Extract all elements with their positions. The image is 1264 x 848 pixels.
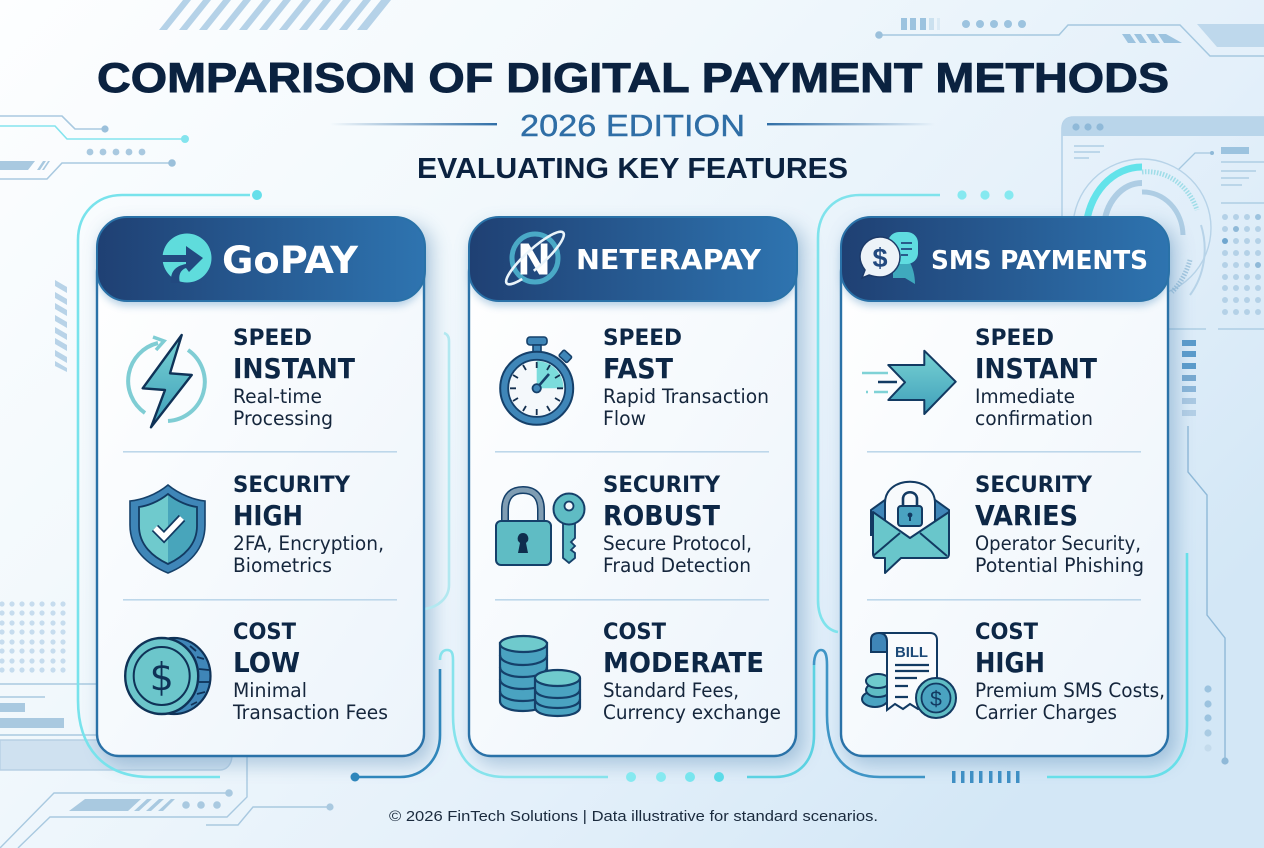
speed text: Real-time [233,385,322,408]
security text: HIGH [233,499,303,532]
header shadow [470,226,796,306]
cost text: Currency exchange [603,701,781,724]
card body [841,250,1168,756]
connector lines around cards [78,190,1187,783]
decoration: top hatch stripes [159,0,391,30]
decoration: dashboard window with gauge [1062,117,1264,329]
speed text: FAST [603,352,673,385]
speed text: Processing [233,407,333,430]
security text: 2FA, Encryption, [233,532,384,555]
panel: sms payments [841,217,1169,756]
decoration: lower left panels and circuit [0,684,334,848]
cost text: MODERATE [603,646,764,679]
cost text: HIGH [975,646,1045,679]
cost text [603,620,781,724]
row: security [871,473,1144,577]
header shadow [842,226,1168,306]
cost text: Standard Fees, [603,679,739,702]
security text: Secure Protocol, [603,532,752,555]
header bar [469,217,797,301]
security text: Potential Phishing [975,554,1144,577]
security text [975,473,1144,577]
icon: stopwatch [500,337,573,425]
row: cost [862,620,1165,724]
speed text: Rapid Transaction [603,385,769,408]
icon: coin [125,638,210,714]
footer note: © 2026 FinTech Solutions | Data illustrative for standard scenarios. [389,808,878,825]
row: speed [128,326,355,430]
speed text: SPEED [603,326,682,351]
cost text: COST [233,620,296,645]
decoration: right side bars, line and dots [1182,340,1229,765]
icon: lightning bolt [128,335,205,427]
cost text: COST [603,620,666,645]
row: security [496,473,752,577]
icon: padlock and key [496,490,584,565]
decoration: left hatch [55,280,67,372]
speed text: Immediate [975,385,1075,408]
security text: SECURITY [975,473,1093,498]
row: security [130,473,384,577]
panel: gopay [97,217,425,756]
header bar [97,217,425,301]
security text: Fraud Detection [603,554,751,577]
panel: neterapay [469,217,797,756]
speed text: confirmation [975,407,1093,430]
speed text: Flow [603,407,646,430]
speed text: SPEED [975,326,1054,351]
decoration: lower left dot grid [0,601,66,673]
icon: bill with coins: BILL [895,645,928,661]
subtitle rule left [330,123,497,125]
icon: neterapay logo: N [518,235,550,284]
cost text: COST [975,620,1038,645]
card shadows [101,224,1177,765]
decoration: upper left circuit [0,116,189,179]
speed text: INSTANT [233,352,355,385]
header shadow [98,226,424,306]
subtitle: 2026 EDITION [520,108,745,143]
icon: shield [130,485,205,573]
cost text: LOW [233,646,300,679]
cost text: Transaction Fees [232,701,388,724]
security text [603,473,752,577]
security text: ROBUST [603,499,720,532]
cost text: Premium SMS Costs, [975,679,1165,702]
icon: coin: $ [150,655,174,699]
icon: gopay logo [162,234,212,283]
speed text [975,326,1097,430]
icon: bill with coins [862,633,956,718]
section heading: EVALUATING KEY FEATURES [417,153,848,185]
security text [233,473,384,577]
speed text [233,326,355,430]
sms payments name: SMS PAYMENTS [931,246,1148,276]
neterapay name: NETERAPAY [576,244,762,276]
decoration: top right circuit [875,18,1264,56]
subtitle rule right [767,123,935,125]
security text: SECURITY [233,473,351,498]
row: cost [125,620,388,724]
header bar [841,217,1169,301]
title: COMPARISON OF DIGITAL PAYMENT METHODS [97,54,1169,101]
gopay name: GoPAY [222,239,359,282]
row: speed [862,326,1097,430]
row: cost [500,620,781,724]
speed text [603,326,769,430]
speed text: SPEED [233,326,312,351]
icon: stacks of coins [500,636,580,716]
icon: sms chat bubbles: $ [872,243,888,273]
security text: Biometrics [233,554,332,577]
icon: locked envelope [871,482,949,573]
cost text [232,620,388,724]
cost text: Minimal [233,679,307,702]
cost text: Carrier Charges [975,701,1117,724]
security text: VARIES [975,499,1078,532]
icon: sms chat bubbles [860,232,918,284]
security text: SECURITY [603,473,721,498]
speed text: INSTANT [975,352,1097,385]
icon: neterapay logo [501,226,569,290]
card body [97,250,424,756]
security text: Operator Security, [975,532,1141,555]
icon: speed arrow [862,351,956,414]
icon: bill with coins: $ [930,688,942,711]
cost text [975,620,1165,724]
row: speed [500,326,769,430]
card body [469,250,796,756]
